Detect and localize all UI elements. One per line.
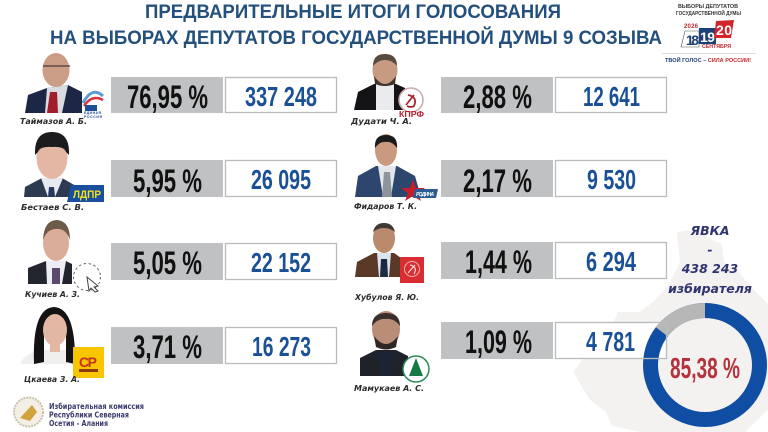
party logo: Справедливая Россия <box>73 347 104 378</box>
election commission name <box>49 402 144 428</box>
percent box: 1,09 % <box>465 324 532 360</box>
title <box>50 2 662 49</box>
name: Таймазов А. Б. <box>20 117 87 126</box>
name: Бестаев С. В. <box>21 203 84 212</box>
candidate row: Кучиев <box>25 220 336 299</box>
portrait: Фидаров <box>355 134 421 197</box>
portrait: Бестаев <box>24 132 76 197</box>
votes box: 26 095 <box>251 164 311 195</box>
votes box: 16 273 <box>252 331 311 362</box>
votes box <box>226 244 336 280</box>
name: Мамукаев А. С. <box>354 384 424 393</box>
votes box: Мамукаев: 4 781 <box>586 326 635 357</box>
votes box <box>556 242 666 278</box>
party logo: Коммунисты России <box>400 257 424 283</box>
votes box <box>556 78 666 112</box>
turnout caption: - <box>707 242 713 257</box>
party logo: Новые люди <box>74 264 100 292</box>
percent box <box>441 160 553 199</box>
percent box: 76,95 % <box>127 79 208 115</box>
turnout caption: избирателя <box>668 281 752 296</box>
portrait: Кучиев <box>28 220 72 284</box>
title: НА ВЫБОРАХ ДЕПУТАТОВ ГОСУДАРСТВЕННОЙ ДУМЫ 9 СОЗЫВА <box>50 27 662 49</box>
election logo: ВЫБОРЫ ДЕПУТАТОВ <box>678 4 738 10</box>
percent box: 1,44 % <box>465 244 532 280</box>
percent box: 3,71 % <box>133 329 202 365</box>
election logo: ТВОЙ ГОЛОС – СИЛА РОССИИ! <box>665 56 751 64</box>
candidate row: Цкаева <box>20 307 336 384</box>
percent box: 5,05 % <box>133 245 202 281</box>
votes box <box>226 78 336 112</box>
portrait: Хубулов <box>355 223 401 277</box>
turnout caption <box>668 223 752 296</box>
percent box <box>441 242 553 280</box>
votes box: 9 530 <box>587 164 636 195</box>
election logo: 18 <box>686 32 699 48</box>
party logo: ЛДПР <box>67 185 104 202</box>
election logo: СЕНТЯБРЯ <box>702 44 731 50</box>
background map of North Ossetia <box>573 229 768 432</box>
candidate row: Таймазов <box>20 53 336 126</box>
title: ПРЕДВАРИТЕЛЬНЫЕ ИТОГИ ГОЛОСОВАНИЯ <box>145 2 561 23</box>
percent box <box>441 322 553 360</box>
election logo: 20 <box>716 22 732 38</box>
election commission name: Избирательная комиссия <box>49 402 144 411</box>
election logo: 2026 <box>684 24 699 30</box>
name: Дудати Ч. А. <box>350 117 412 126</box>
votes box <box>226 328 336 364</box>
name: Хубулов Я. Ю. <box>354 292 419 302</box>
turnout caption: 438 243 <box>681 261 738 276</box>
party logo: Единая Россия <box>82 90 103 119</box>
votes box: Мамукаев <box>556 322 666 358</box>
percent box <box>111 160 223 199</box>
election commission name: Республики Северная <box>49 410 129 420</box>
portrait: Таймазов <box>25 53 82 113</box>
turnout donut chart <box>650 310 760 420</box>
election logo <box>662 4 756 64</box>
votes box fill <box>556 322 666 358</box>
party logo: Родина <box>401 180 438 201</box>
percent box: 2,88 % <box>463 79 532 115</box>
votes box <box>556 160 666 196</box>
portrait: Дудати <box>354 54 405 110</box>
votes box: 12 641 <box>583 81 640 112</box>
votes box: 6 294 <box>586 246 636 277</box>
percent box: 5,95 % <box>133 163 202 199</box>
election commission name: Осетия - Алания <box>49 419 108 428</box>
party logo: Справедливая Россия: СР <box>79 354 97 370</box>
turnout caption: ЯВКА <box>689 223 730 238</box>
party logo: Единая Россия: РОССИЯ <box>84 115 102 119</box>
name: Фидаров Т. К. <box>354 202 417 211</box>
election logo: ГОСУДАРСТВЕННОЙ ДУМЫ <box>676 9 741 17</box>
candidate row: Хубулов <box>354 223 666 302</box>
party logo: Единая Россия: ЕДИНАЯ <box>84 111 101 115</box>
percent box: 2,17 % <box>463 163 532 199</box>
candidate row: Мамукаев <box>354 311 666 393</box>
party logo: КПРФ <box>399 88 424 119</box>
votes box: 22 152 <box>251 247 311 278</box>
percent box <box>111 77 223 115</box>
votes box: 337 248 <box>245 81 317 112</box>
party logo: КПРФ: КПРФ <box>399 110 424 119</box>
party logo: Родина: РОДИНА <box>416 192 434 198</box>
party logo: ЛДПР: ЛДПР <box>73 189 101 201</box>
portrait: Мамукаев <box>360 311 408 376</box>
portrait: Цкаева <box>20 307 76 364</box>
party logo: Зелёные <box>403 356 429 382</box>
votes box <box>226 160 336 196</box>
election logo: 19 <box>700 29 715 45</box>
candidate row: Дудати <box>350 54 666 126</box>
candidate row: Бестаев <box>21 132 336 212</box>
election commission emblem <box>14 398 43 426</box>
candidate row: Фидаров <box>354 134 666 211</box>
name: Цкаева З. А. <box>24 375 80 384</box>
name: Кучиев А. З. <box>25 290 80 299</box>
